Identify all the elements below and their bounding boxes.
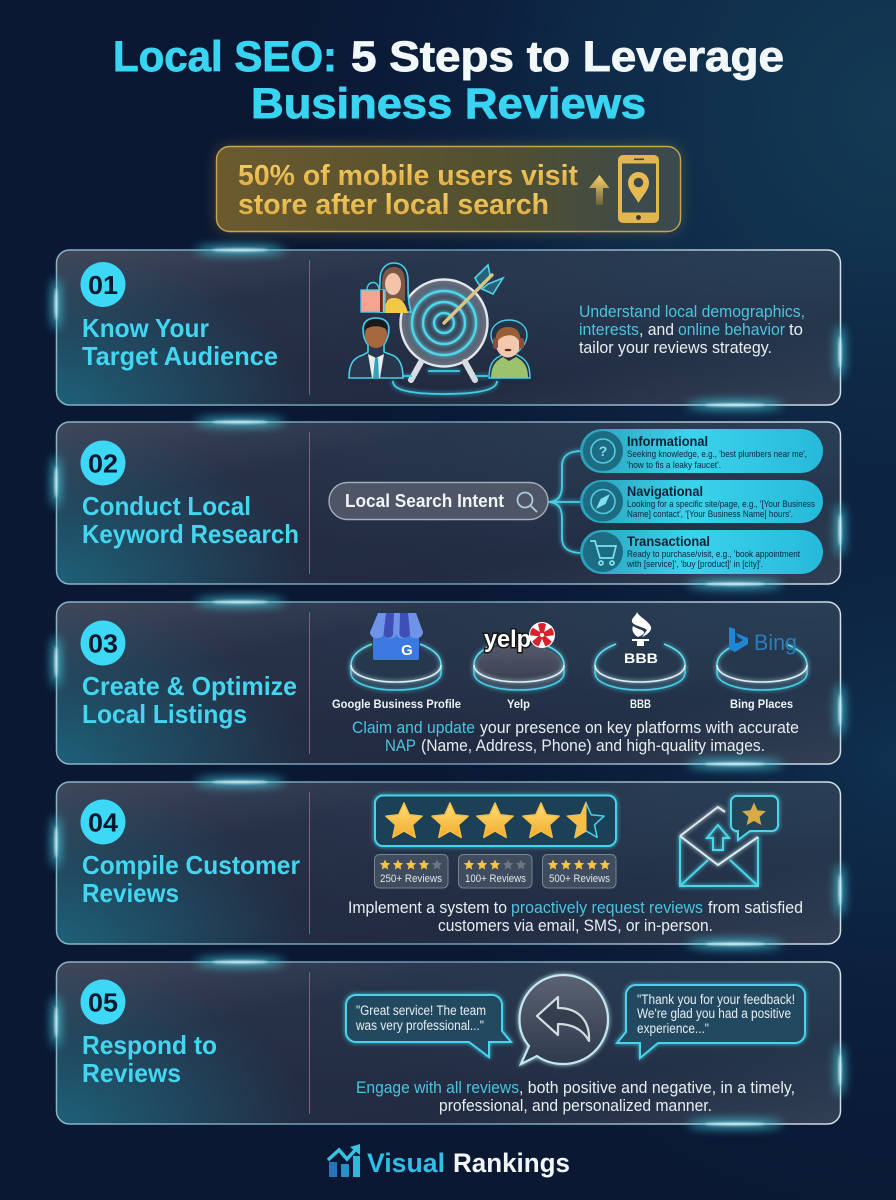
step heading: Reviews	[82, 1058, 181, 1088]
step heading: Local Listings	[82, 699, 247, 729]
icon: businessman	[349, 318, 403, 378]
description: Claim and update	[352, 719, 475, 737]
speech bubble: business reply: We're glad you had a positive	[637, 1006, 791, 1021]
platform: bbb	[595, 612, 685, 711]
platform: yelp: Yelp	[507, 697, 530, 711]
platform: bing places: Bing	[754, 630, 797, 655]
speech bubble: customer review: was very professional..."	[355, 1018, 484, 1033]
platform: yelp: yelp	[484, 626, 531, 653]
speech bubble: customer review	[346, 995, 511, 1057]
panel: step 1 know your target audience	[56, 250, 840, 405]
panel: step 3 create and optimize local listings	[56, 602, 840, 764]
star rating box	[375, 796, 616, 846]
review badge 500+: 500+ Reviews	[549, 873, 610, 885]
option: navigational: Name] contact', '[Your Business Name] hours'.	[627, 509, 793, 520]
description: your presence on key platforms with accurate	[480, 719, 799, 737]
review badge 250+	[374, 854, 448, 888]
review badge 100+: 100+ Reviews	[465, 873, 526, 885]
option: transactional	[580, 530, 823, 574]
description	[356, 1079, 795, 1115]
option: transactional: with [service]', 'buy [product]' in [city]'.	[626, 559, 763, 570]
description: Engage with all reviews	[356, 1079, 519, 1097]
title: 5 Steps to Leverage	[351, 33, 784, 81]
icon: phone with location pin	[618, 155, 659, 223]
speech bubble: business reply: experience..."	[637, 1021, 709, 1036]
icon: envelope with star bubble	[680, 796, 778, 886]
step heading	[82, 850, 300, 908]
step number 01: 01	[88, 270, 118, 300]
platform: bbb: BBB	[624, 650, 658, 666]
option: informational: Seeking knowledge, e.g., 'best plumbers near me',	[627, 449, 807, 460]
description: to	[789, 321, 803, 339]
callout: mobile users statistic	[216, 146, 681, 232]
step heading: Know Your	[82, 313, 209, 343]
connector lines	[548, 451, 582, 553]
panel: step 4 compile customer reviews	[56, 782, 840, 944]
logo: visual rankings	[328, 1144, 570, 1178]
platform: bbb: BBB	[630, 697, 651, 711]
icon: magnifier	[518, 492, 537, 512]
description: proactively request reviews	[511, 899, 703, 917]
description	[348, 899, 803, 935]
review badge 500+	[542, 854, 616, 888]
description: Implement a system to	[348, 899, 507, 917]
icon: support agent with headset	[489, 320, 530, 378]
title: Local SEO:	[113, 33, 337, 81]
description: NAP	[385, 737, 416, 755]
icon: reply arrow bubble	[519, 975, 608, 1064]
description: from satisfied	[708, 899, 803, 917]
icon: shopper woman	[361, 263, 411, 313]
step number 04: 04	[88, 808, 119, 838]
step heading: Create & Optimize	[82, 671, 297, 701]
option: informational	[580, 429, 823, 473]
description: (Name, Address, Phone) and high-quality images.	[421, 737, 765, 755]
step number 05	[80, 980, 126, 1024]
option: informational: 'how to fis a leaky faucet'.	[627, 460, 721, 471]
callout: mobile users statistic: 50% of mobile users visit	[238, 160, 578, 192]
description: tailor your reviews strategy.	[579, 339, 772, 357]
icon: rising chart	[328, 1144, 360, 1177]
option: informational: Informational	[627, 433, 708, 449]
search pill: Local Search Intent	[345, 491, 504, 511]
title	[113, 33, 784, 128]
callout: mobile users statistic: store after local search	[238, 189, 549, 221]
description	[579, 303, 805, 357]
platform: yelp	[474, 622, 564, 711]
step heading: Target Audience	[82, 341, 278, 371]
option: navigational	[580, 480, 823, 523]
platform: google business profile	[332, 613, 461, 711]
step heading	[82, 313, 278, 371]
description: , and	[639, 321, 674, 339]
platform: bing places	[717, 627, 807, 711]
panel: step 5 respond to reviews	[56, 962, 840, 1124]
description: online behavior	[678, 321, 785, 339]
search pill	[329, 482, 548, 520]
speech bubble: customer review: "Great service! The team	[356, 1003, 486, 1018]
step heading	[82, 671, 297, 729]
option: informational: ?	[599, 443, 607, 459]
title: Business Reviews	[251, 80, 646, 128]
platform: google business profile: Google Business Profile	[332, 697, 461, 711]
platform: google business profile: G	[401, 642, 413, 659]
step heading: Conduct Local	[82, 491, 251, 521]
step heading: Respond to	[82, 1030, 217, 1060]
description: interests	[579, 321, 639, 339]
description	[352, 719, 799, 755]
step number 03: 03	[88, 628, 118, 658]
description: Understand local demographics,	[579, 303, 805, 321]
icon: up arrow	[589, 175, 610, 205]
option: navigational: Navigational	[627, 483, 703, 499]
step heading: Keyword Research	[82, 519, 299, 549]
icon: target with arrow	[393, 265, 503, 394]
logo: visual rankings: Visual	[367, 1148, 445, 1178]
step number 03	[80, 620, 126, 666]
speech bubble: business reply	[617, 985, 805, 1058]
review badge 100+	[458, 854, 532, 888]
step number 05: 05	[88, 988, 118, 1018]
description: customers via email, SMS, or in-person.	[438, 917, 713, 935]
step heading: Compile Customer	[82, 850, 300, 880]
review badge 250+: 250+ Reviews	[380, 873, 442, 885]
logo: visual rankings: Rankings	[453, 1148, 570, 1178]
description: professional, and personalized manner.	[439, 1097, 712, 1115]
step heading	[82, 1030, 217, 1088]
description: , both positive and negative, in a timely,	[519, 1079, 795, 1097]
step number 02	[80, 440, 126, 486]
step number 01	[80, 262, 126, 307]
platform: bing places: Bing Places	[730, 697, 793, 711]
option: transactional: Transactional	[627, 533, 710, 549]
panel: step 2 conduct local keyword research	[56, 422, 840, 584]
step heading: Reviews	[82, 878, 179, 908]
step number 02: 02	[88, 448, 118, 478]
connector line	[440, 668, 720, 670]
option: transactional: Ready to purchase/visit, e.g., 'book appointment	[627, 549, 800, 560]
speech bubble: business reply: "Thank you for your feedback!	[637, 992, 795, 1007]
option: navigational: Looking for a specific site/page, e.g., '[Your Business	[627, 499, 815, 510]
step number 04	[80, 800, 126, 844]
step heading	[82, 491, 299, 549]
